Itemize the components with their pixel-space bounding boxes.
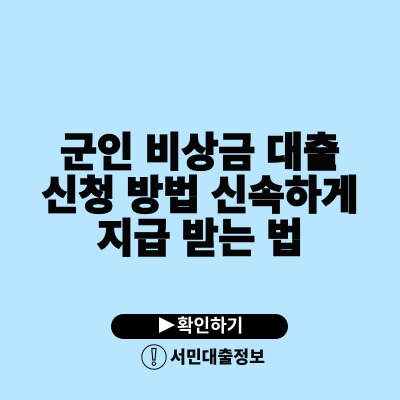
title line 2: 신청 방법 신속하게: [42, 174, 358, 218]
button label: 확인하기: [177, 316, 243, 336]
icon: exclamation circle: [141, 344, 167, 370]
title line 1: 군인 비상금 대출: [60, 131, 340, 175]
title: [42, 131, 358, 261]
button: confirm: [111, 314, 288, 339]
brand name: 서민대출정보: [170, 347, 265, 367]
title line 3: 지급 받는 법: [97, 217, 303, 261]
button icon: play triangle: [159, 317, 175, 333]
